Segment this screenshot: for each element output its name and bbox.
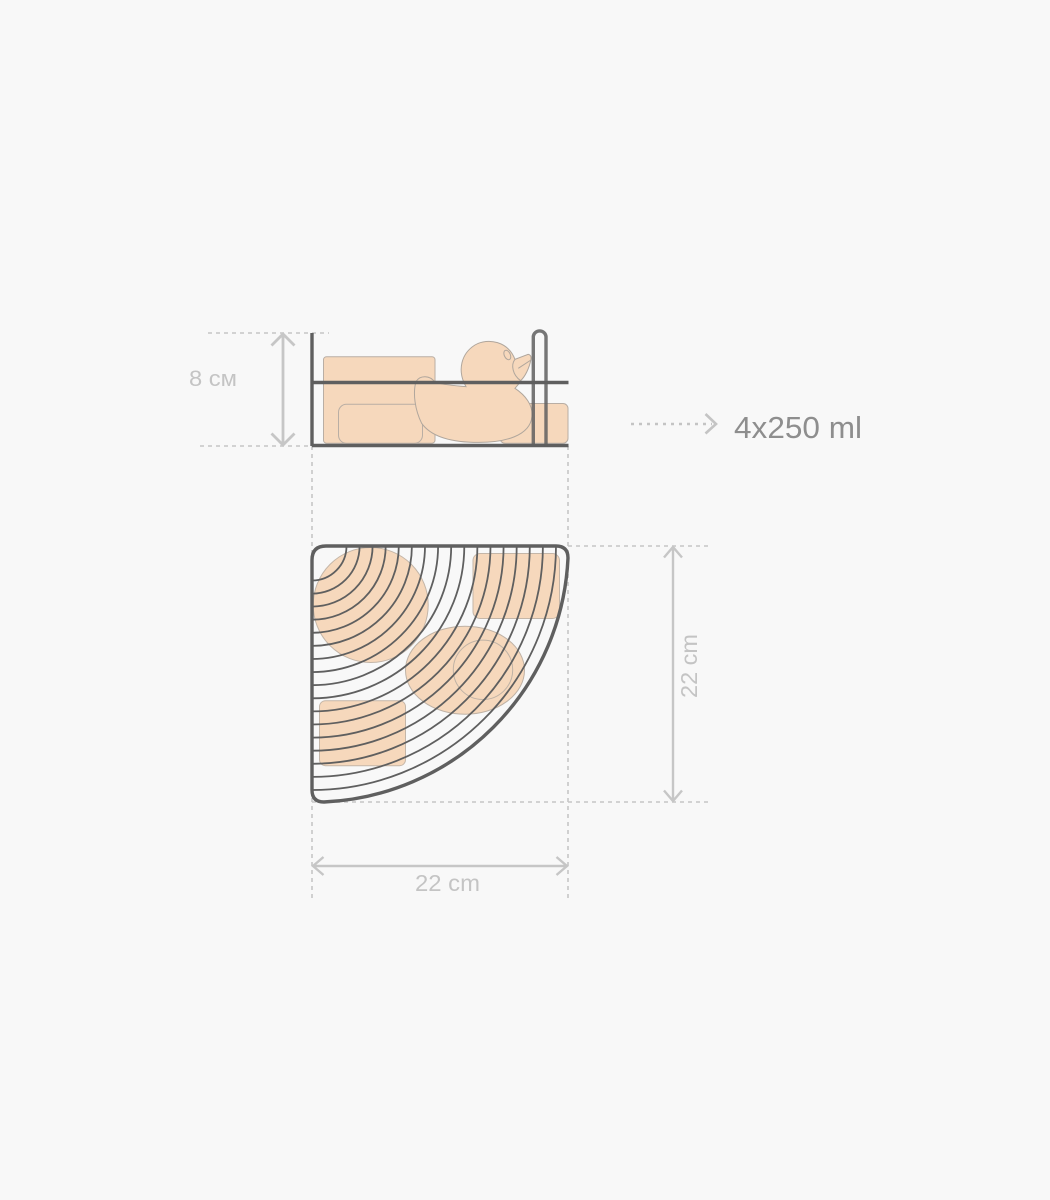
- label: depth 22 cm: 22 cm: [676, 634, 702, 698]
- arrow: width dimension: [313, 857, 567, 875]
- label: capacity: 4x250 ml: [734, 410, 862, 445]
- top view: shelf with contents: [310, 544, 570, 804]
- side view: small box: [338, 404, 422, 443]
- infographic: corner shelf dimensions: [190, 329, 860, 898]
- label: height 8 cm: 8 см: [189, 366, 237, 391]
- top view: rectangular box bottom left: [320, 701, 406, 766]
- side view: wire frame: [312, 331, 568, 447]
- side view: shelf with contents: [312, 331, 568, 447]
- top view: rectangular box top right: [473, 554, 560, 618]
- icon: rubber duck: [414, 341, 532, 442]
- top view: round container: [313, 548, 428, 662]
- top view: outer frame: [312, 546, 568, 802]
- side view: right bottle: [500, 404, 568, 443]
- top view: concentric wires: [314, 548, 557, 791]
- top view: rubber duck: [406, 626, 524, 714]
- arrow: depth dimension: [664, 547, 682, 801]
- arrow: dotted capacity pointer: [631, 414, 716, 434]
- label: width 22 cm: 22 cm: [415, 870, 480, 896]
- arrow: height dimension: [272, 334, 294, 445]
- side view: large box: [324, 357, 435, 443]
